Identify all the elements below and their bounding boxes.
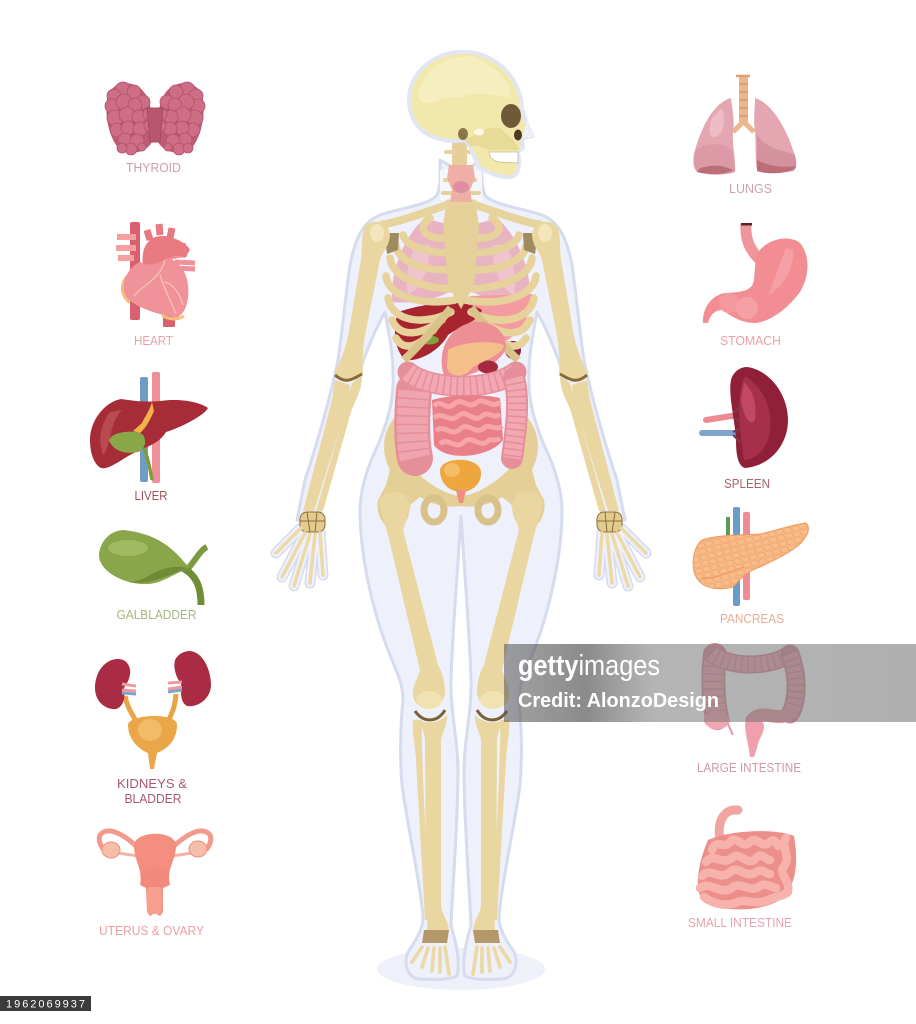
label: pancreas: PANCREAS [720,612,784,626]
gallbladder organ [99,530,207,605]
large intestine in torso [408,372,517,458]
label: thyroid: THYROID [126,161,181,175]
pancreas in torso [447,342,504,376]
ground shadow [377,948,545,990]
label: spleen: SPLEEN [724,477,770,491]
arm, leg and pelvis bones [276,200,646,974]
label: stomach: STOMACH [720,334,781,348]
stomach in torso [442,322,506,376]
kidney in torso [478,360,498,374]
lungs organ [693,75,796,175]
label: large intestine: LARGE INTESTINE [697,761,801,775]
stomach organ [703,223,808,323]
body silhouette [276,160,646,980]
label: uterus and ovary: UTERUS & OVARY [99,924,205,938]
label: small intestine: SMALL INTESTINE [688,916,792,930]
body silhouette with skeleton and internal organs [276,52,646,990]
cervical vertebrae [443,142,479,193]
heart organ [116,222,195,327]
rib cage [386,218,536,360]
spleen organ [702,367,788,468]
spleen in torso [505,341,521,359]
thyroid and larynx in neck [447,165,475,202]
watermark logo: gettyimages [518,650,660,682]
label: kidneys and bladder: BLADDER [124,792,182,806]
bile duct and gallbladder in torso [419,312,447,344]
watermark banner [504,644,916,722]
liver in torso [395,303,482,360]
small intestine in torso [432,395,503,456]
label: heart: HEART [134,334,173,348]
kidneys and bladder organ [95,651,211,769]
label: lungs: LUNGS [729,182,772,196]
uterus and ovary organ [99,831,211,916]
small intestine organ [698,810,796,909]
bladder in torso [440,460,481,503]
label: kidneys and bladder [117,777,188,806]
sternum [443,200,479,309]
large intestine organ [704,654,796,757]
image id tag [0,996,91,1011]
label: kidneys and bladder: KIDNEYS & [117,777,188,791]
label: liver: LIVER [134,489,168,503]
right stomach behind ribs [470,294,532,345]
skull [409,52,533,177]
lungs behind ribs [392,218,530,303]
pancreas organ [693,507,808,606]
image id tag: 1962069937 [6,998,85,1010]
label: gallbladder: GALBLADDER [116,608,196,622]
liver organ [90,372,208,483]
watermark credit: Credit: AlonzoDesign [518,690,719,712]
thyroid organ [105,82,205,155]
